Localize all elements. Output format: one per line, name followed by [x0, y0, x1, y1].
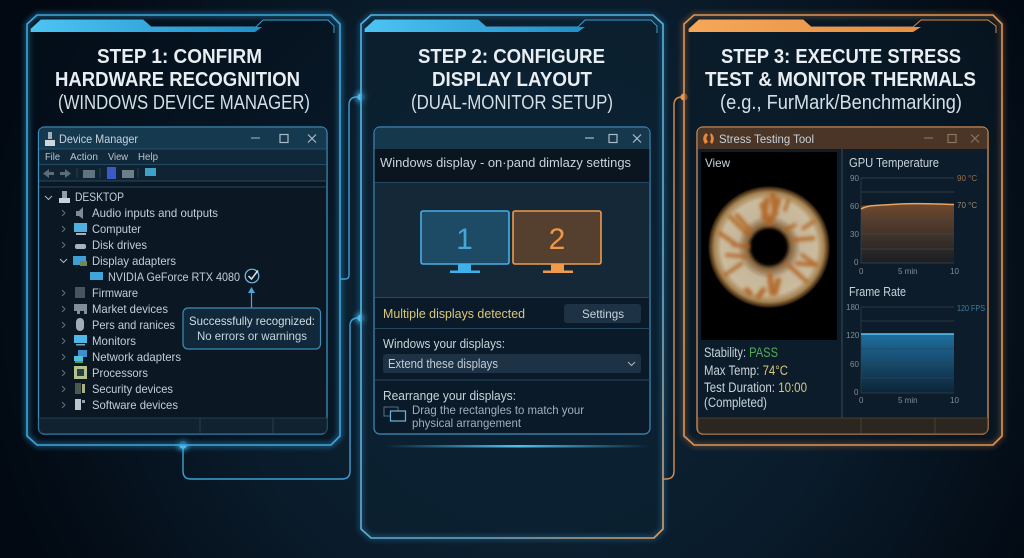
panel: step 1 — [27, 15, 340, 445]
icon: monitor — [74, 335, 87, 346]
chart: GPU temperature: 0 — [859, 267, 864, 276]
header tab — [31, 20, 334, 33]
test stats — [704, 345, 807, 410]
menu bar: Help — [138, 151, 158, 163]
test stats: Stability: PASS — [704, 345, 778, 360]
chart: GPU temperature: 10 — [950, 267, 959, 276]
window: device manager — [38, 127, 327, 434]
device tree: Pers and ranices — [92, 318, 175, 332]
window heading text: Windows display - on·pand dimlazy settings — [380, 155, 631, 170]
device tree: Audio inputs and outputs — [92, 206, 218, 220]
device tree: Monitors — [92, 334, 136, 348]
icon: processor — [74, 366, 87, 379]
chart: GPU temperature: 70 °C — [957, 201, 977, 210]
heading: STEP 2: CONFIGURE — [418, 46, 605, 68]
chart: frame rate — [846, 285, 985, 405]
chart: frame rate: 0 — [854, 388, 859, 397]
rearrange section: Drag the rectangles to match your — [412, 403, 584, 417]
iris render — [708, 186, 830, 308]
icon: nvidia adapter — [90, 272, 103, 280]
rearrange section: physical arrangement — [412, 416, 522, 430]
test stats: Max Temp: 74°C — [704, 363, 788, 378]
window: display settings — [374, 127, 650, 434]
title bar — [703, 132, 979, 146]
chart: frame rate: 0 — [859, 396, 864, 405]
detection row: Settings — [582, 307, 624, 321]
icon: market devices — [74, 304, 87, 314]
callout — [183, 308, 320, 349]
header tab — [689, 20, 996, 33]
window: stress testing tool — [697, 127, 988, 434]
view pane: View — [705, 156, 730, 170]
chart: frame rate: Frame Rate — [849, 285, 906, 299]
heading: (e.g., FurMark/Benchmarking) — [720, 92, 962, 114]
callout: Successfully recognized: — [189, 314, 315, 328]
chart: GPU temperature: 90 — [850, 174, 859, 183]
icon: network — [74, 350, 87, 363]
heading: STEP 1: CONFIRM — [97, 46, 262, 68]
chart: frame rate: 5 min — [898, 396, 918, 405]
test stats: (Completed) — [704, 395, 767, 410]
heading: (DUAL-MONITOR SETUP) — [411, 92, 613, 114]
chart: frame rate: 10 — [950, 396, 959, 405]
title bar — [45, 132, 316, 146]
rearrange section — [383, 389, 584, 430]
title bar: Stress Testing Tool — [719, 132, 814, 146]
heading: (WINDOWS DEVICE MANAGER) — [58, 92, 310, 114]
device tree: Software devices — [92, 398, 178, 412]
monitor 1 — [421, 211, 509, 273]
device tree: Computer — [92, 222, 141, 236]
device tree — [45, 190, 240, 412]
connector: step 1 to step 2 (lower) — [177, 312, 367, 479]
icon: firmware — [75, 287, 85, 298]
device tree: NVIDIA GeForce RTX 4080 — [108, 270, 240, 284]
device tree: Security devices — [92, 382, 173, 396]
status bar — [39, 418, 327, 434]
menu bar — [45, 151, 158, 163]
heading: STEP 3: EXECUTE STRESS — [721, 46, 961, 68]
toolbar — [43, 167, 156, 179]
monitor 2 — [513, 211, 601, 273]
panel: step 3 — [684, 15, 1002, 445]
menu bar: Action — [70, 151, 98, 163]
heading — [55, 46, 310, 114]
display mode dropdown: Extend these displays — [388, 357, 498, 371]
heading — [705, 46, 976, 114]
display mode dropdown: Windows your displays: — [383, 337, 505, 351]
rearrange section: Rearrange your displays: — [383, 389, 516, 403]
status bar — [698, 418, 988, 434]
heading: TEST & MONITOR THERMALS — [705, 69, 976, 91]
arrow to adapter — [248, 287, 255, 308]
chart: GPU temperature: 60 — [850, 202, 859, 211]
chart: GPU temperature: 5 min — [898, 267, 918, 276]
glow bar — [385, 445, 650, 448]
icon: mouse — [76, 318, 84, 331]
icon: audio — [76, 207, 83, 219]
header tab — [365, 20, 657, 33]
chart: frame rate: 120 — [846, 331, 860, 340]
chart: GPU temperature: 0 — [854, 258, 859, 267]
chart: GPU temperature — [849, 156, 977, 276]
icon: check mark — [245, 269, 259, 283]
display mode dropdown — [383, 337, 641, 373]
icon: computer — [74, 223, 87, 235]
heading: DISPLAY LAYOUT — [432, 69, 592, 91]
chart: frame rate: 180 — [846, 303, 860, 312]
icon: software — [75, 399, 85, 410]
monitor 2: 2 — [549, 223, 565, 256]
detection row: Multiple displays detected — [383, 307, 525, 321]
connector: step 2 to step 3 — [663, 93, 688, 479]
detection row — [383, 304, 641, 323]
device tree: Processors — [92, 366, 148, 380]
heading: HARDWARE RECOGNITION — [55, 69, 300, 91]
connector: step 1 to step 2 (upper) — [340, 91, 367, 279]
device tree: Firmware — [92, 286, 138, 300]
icon: display adapter — [73, 256, 87, 266]
test stats: Test Duration: 10:00 — [704, 380, 807, 395]
chart: GPU temperature: 30 — [850, 230, 859, 239]
icon: security — [75, 383, 85, 394]
menu bar: File — [45, 151, 60, 163]
chart: frame rate: 120 FPS — [957, 304, 985, 313]
heading — [411, 46, 613, 114]
menu bar: View — [108, 151, 128, 163]
device tree: Disk drives — [92, 238, 147, 252]
chart: GPU temperature: GPU Temperature — [849, 156, 939, 170]
icon: disk — [75, 244, 86, 249]
title bar: Device Manager — [59, 132, 138, 146]
panel: step 2 — [361, 15, 663, 538]
device tree: Display adapters — [92, 254, 176, 268]
view pane — [701, 152, 837, 340]
chart: frame rate: 60 — [850, 360, 859, 369]
monitor 1: 1 — [456, 223, 473, 256]
device tree: DESKTOP — [75, 190, 124, 204]
window controls — [585, 134, 641, 142]
chart: GPU temperature: 90 °C — [957, 174, 977, 183]
device tree: Market devices — [92, 302, 168, 316]
device tree: Network adapters — [92, 350, 181, 364]
callout: No errors or warnings — [197, 329, 307, 343]
